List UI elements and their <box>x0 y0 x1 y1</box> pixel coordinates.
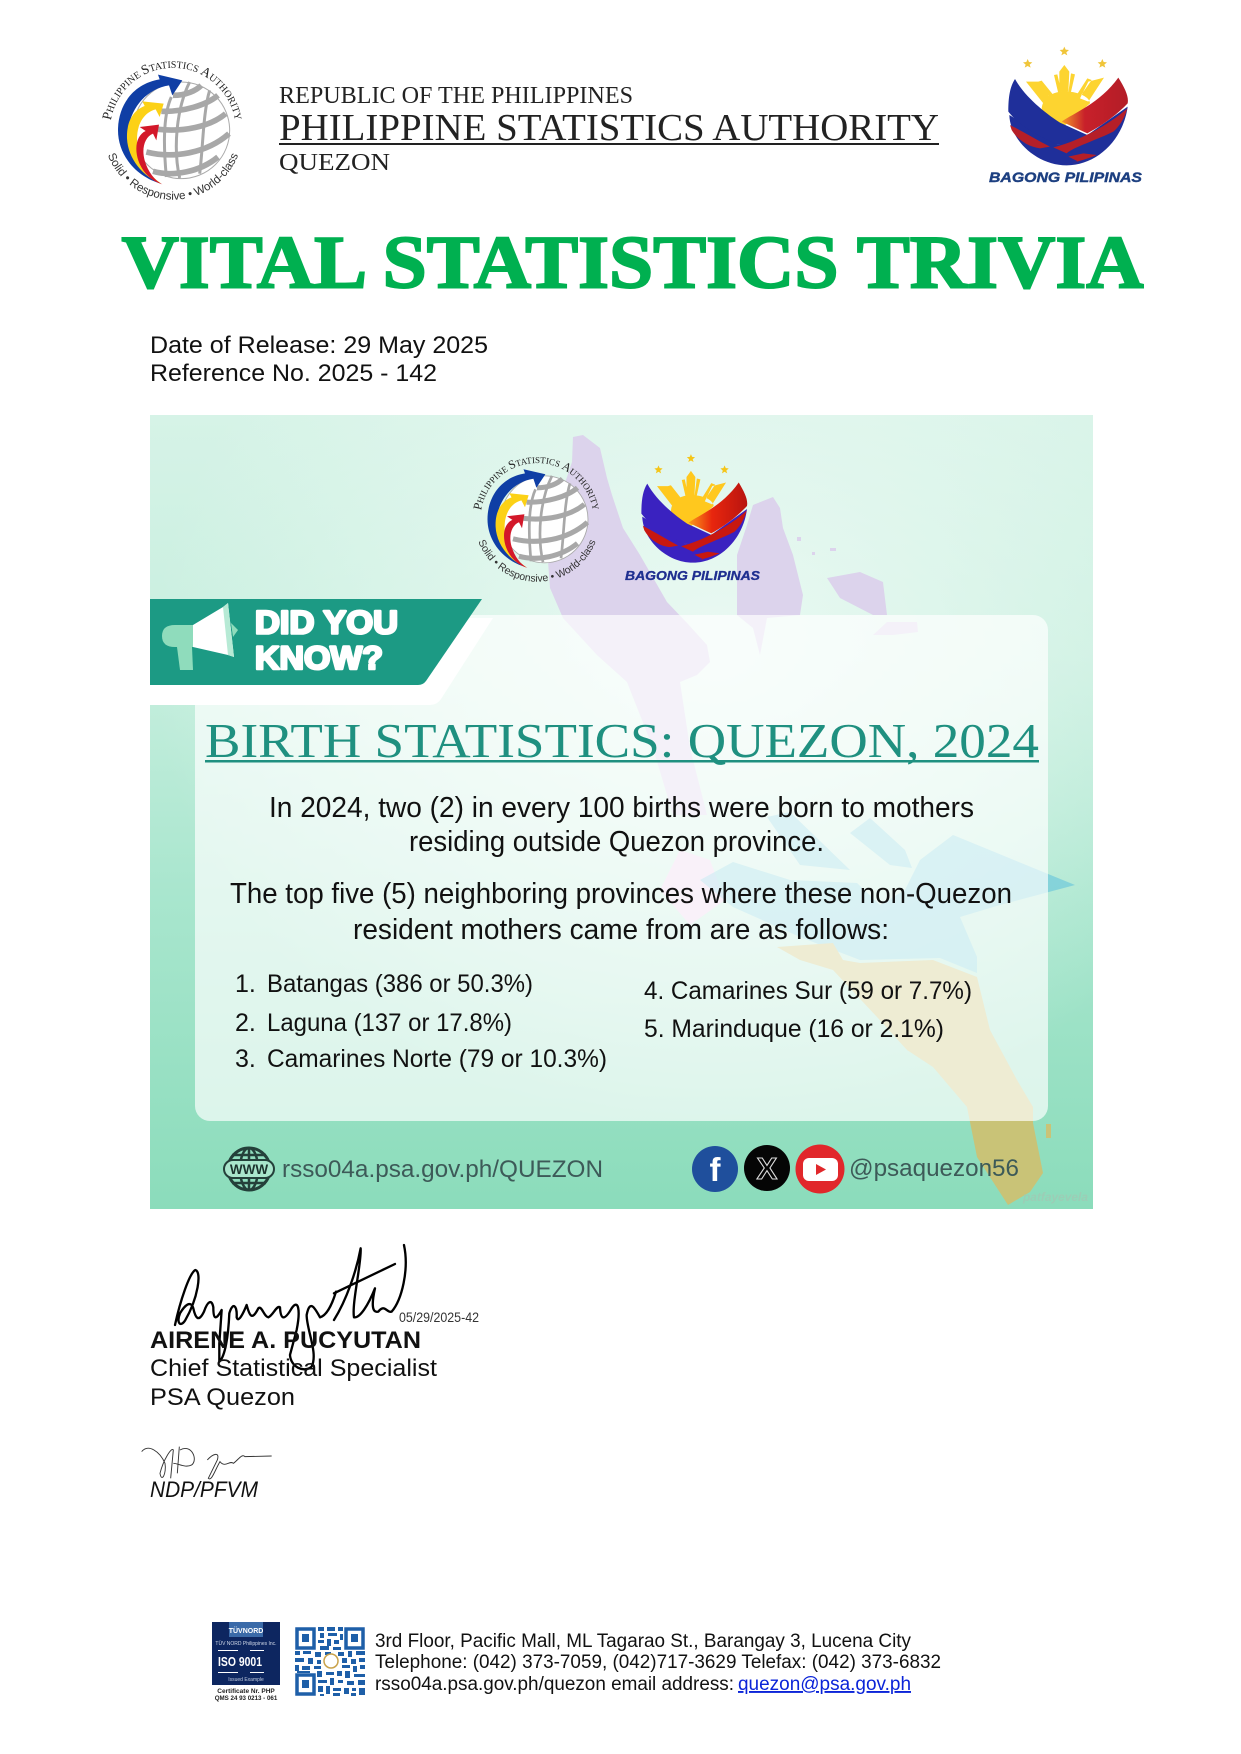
panel logo: Bagong Pilipinas <box>641 454 747 563</box>
map of the region <box>547 435 1075 1205</box>
logo: Philippine Statistics Authority seal: Solid • Responsive • World-class <box>108 153 238 200</box>
list: provinces 1 to 3: Laguna (137 or 17.8%) <box>267 1009 512 1037</box>
map: blue central provinces <box>700 812 1075 973</box>
heading underline <box>205 760 1039 762</box>
logo: Bagong Pilipinas <box>1008 47 1128 165</box>
social handle: @psaquezon56 <box>849 1155 1019 1182</box>
map: pink central province <box>660 850 725 925</box>
map: lavender peninsula province <box>547 435 710 815</box>
icon: facebook: f <box>710 1151 722 1188</box>
panel logo: PSA seal <box>473 457 599 582</box>
badge: ISO 9001: QMS 24 93 0213 - 061 <box>215 1695 278 1702</box>
header line: rule <box>279 143 939 145</box>
QR code <box>295 1627 365 1696</box>
logo: Philippine Statistics Authority seal <box>102 61 242 200</box>
lead paragraph: In 2024, two (2) in every 100 births were born to mothers <box>269 792 974 824</box>
signatory title: Chief Statistical Specialist <box>150 1355 437 1382</box>
panel logo: PSA seal: Solid • Responsive • World-class <box>479 540 596 582</box>
office contact details <box>375 1631 941 1695</box>
icon: facebook <box>692 1146 738 1192</box>
icon: www globe <box>224 1148 274 1190</box>
list: provinces 1 to 3: Batangas (386 or 50.3%) <box>267 970 533 998</box>
banner: did you know <box>150 599 493 705</box>
map: yellow southern provinces <box>777 943 1051 1205</box>
panel background <box>150 415 1093 1209</box>
drafter initials: NDP/PFVM <box>150 1477 258 1502</box>
panel logo: PSA seal: PHILIPPINE STATISTICS AUTHORITY <box>473 457 599 510</box>
panel logo label: BAGONG PILIPINAS <box>625 569 761 583</box>
email link: quezon@psa.gov.ph <box>738 1674 911 1695</box>
icon: megaphone <box>162 603 238 670</box>
artist credit: patfayevela <box>1022 1190 1088 1204</box>
badge: ISO 9001: Issued Example <box>228 1677 264 1683</box>
icon: X <box>744 1145 790 1191</box>
header line: province: QUEZON <box>279 150 390 176</box>
badge: ISO 9001: ISO 9001 <box>218 1655 262 1669</box>
list: provinces 4 and 5: 5. Marinduque (16 or 2.1%) <box>644 1015 944 1043</box>
signature: chief statistical specialist <box>175 1245 406 1369</box>
website url: rsso04a.psa.gov.ph/QUEZON <box>282 1156 603 1183</box>
header: agency name block <box>279 83 939 176</box>
logo label: Bagong Pilipinas: BAGONG PILIPINAS <box>989 169 1143 185</box>
badge: ISO 9001 <box>212 1622 280 1702</box>
panel: birth statistics infographic <box>150 415 1093 1209</box>
website and email label: rsso04a.psa.gov.ph/quezon email address: <box>375 1674 734 1695</box>
content card <box>195 615 1048 1121</box>
list: provinces 1 to 3: 3. <box>235 1045 256 1073</box>
list: provinces 4 and 5: 4. Camarines Sur (59 or 7.7%) <box>644 977 972 1005</box>
panel heading: BIRTH STATISTICS: QUEZON, 2024 <box>205 713 1039 768</box>
list: provinces 1 to 3 <box>235 970 607 1073</box>
icon: youtube <box>796 1144 844 1194</box>
second paragraph: The top five (5) neighboring provinces where these non-Quezon <box>230 878 1012 910</box>
badge: ISO 9001: TÜV NORD Philippines Inc. <box>215 1640 277 1647</box>
list: provinces 1 to 3: 1. <box>235 970 256 998</box>
signatory block <box>150 1327 437 1411</box>
reference number: Reference No. 2025 - 142 <box>150 360 437 387</box>
signatory name: AIRENE A. PUCYUTAN <box>150 1327 421 1354</box>
address: 3rd Floor, Pacific Mall, ML Tagarao St., Barangay 3, Lucena City <box>375 1631 911 1652</box>
second paragraph <box>230 882 1010 940</box>
badge: ISO 9001: Certificate Nr. PHP <box>217 1688 275 1695</box>
panel background glow <box>304 415 1093 962</box>
map: lavender eastern islands <box>797 537 918 635</box>
header line: republic: REPUBLIC OF THE PHILIPPINES <box>279 83 633 109</box>
map: lavender island province <box>737 497 803 655</box>
badge: ISO 9001: TÜVNORD <box>229 1626 263 1635</box>
release info <box>150 332 488 387</box>
banner highlight <box>150 618 493 705</box>
digital signature date stamp: 05/29/2025-42 <box>399 1310 479 1325</box>
list: provinces 1 to 3: Camarines Norte (79 or 10.3%) <box>267 1045 607 1073</box>
list: provinces 4 and 5 <box>644 977 972 1043</box>
banner text <box>256 610 398 670</box>
logo: Philippine Statistics Authority seal: PHILIPPINE STATISTICS AUTHORITY <box>102 61 242 120</box>
lead paragraph: residing outside Quezon province. <box>409 826 824 858</box>
header line: agency: PHILIPPINE STATISTICS AUTHORITY <box>279 107 939 149</box>
release date: Date of Release: 29 May 2025 <box>150 332 488 359</box>
banner text: KNOW? <box>255 640 383 676</box>
banner text: DID YOU <box>255 604 398 640</box>
lead paragraph <box>269 792 974 858</box>
telephone: Telephone: (042) 373-7059, (042)717-3629 Telefax: (042) 373-6832 <box>375 1652 941 1673</box>
icon: www globe: WWW <box>230 1162 268 1177</box>
banner body <box>150 599 482 685</box>
list: provinces 1 to 3: 2. <box>235 1009 256 1037</box>
icon: X: X <box>757 1151 778 1186</box>
initials signatures <box>142 1447 272 1479</box>
signatory office: PSA Quezon <box>150 1384 295 1411</box>
second paragraph: resident mothers came from are as follows: <box>353 914 889 946</box>
